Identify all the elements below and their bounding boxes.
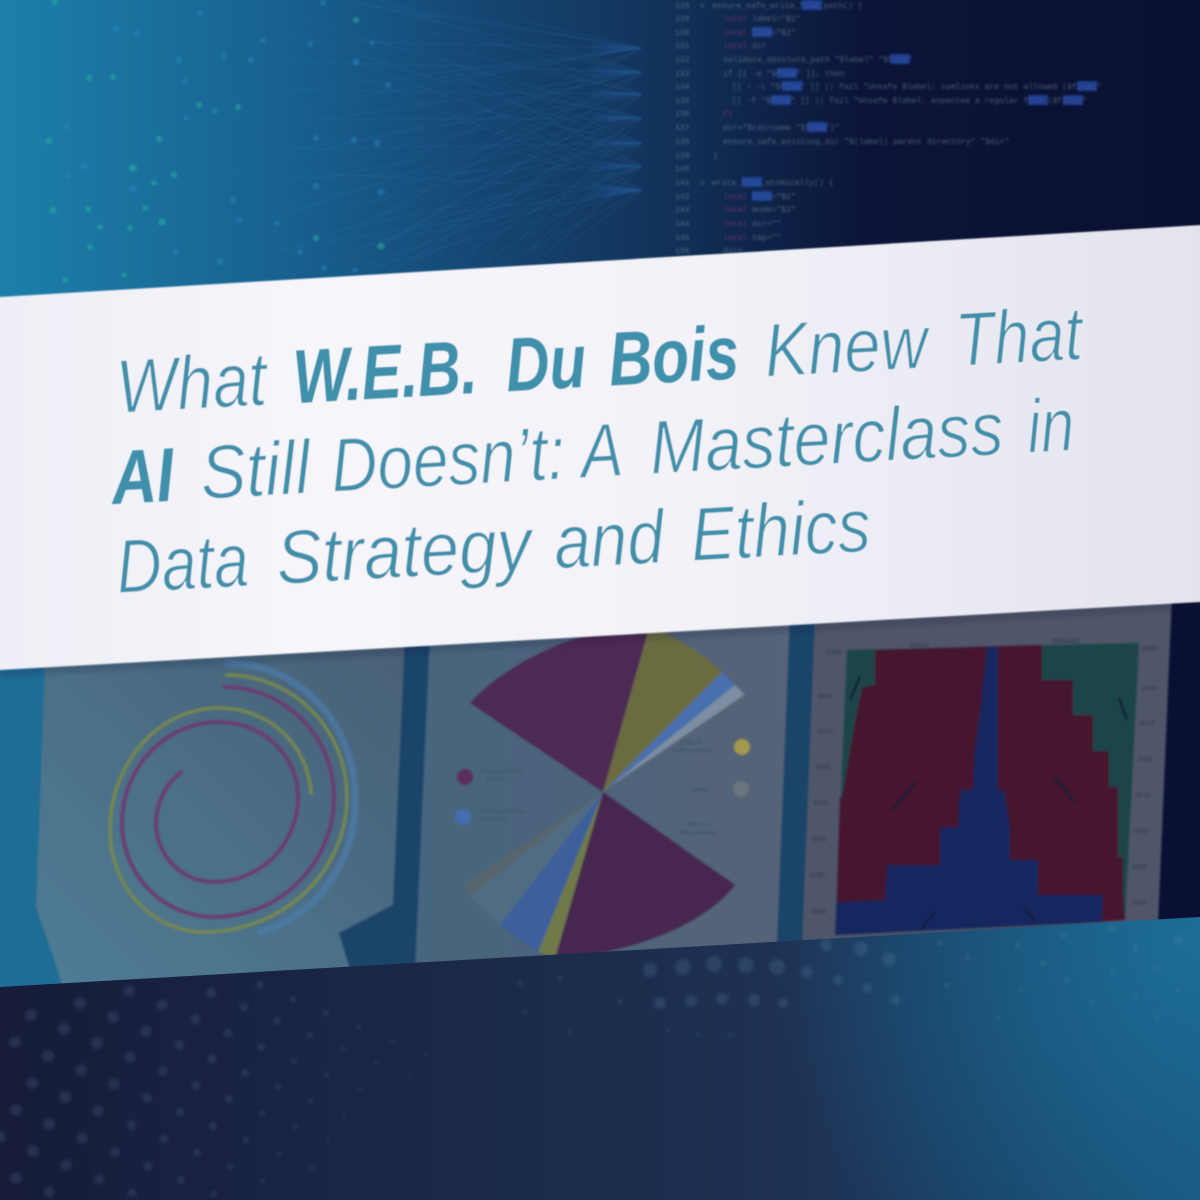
- title line 3: and: [552, 494, 668, 586]
- chart sheet: spiral: [36, 640, 405, 992]
- title line 3: [114, 483, 873, 610]
- bottom right dot pattern: [518, 924, 1183, 1037]
- title line 1: [114, 291, 1087, 430]
- population pyramid chart: 30-40: [812, 909, 826, 915]
- code editor snippet: v: [700, 179, 705, 188]
- pie legend: Negroes of African: [480, 769, 521, 775]
- code editor snippet: write_file_atomically() {: [712, 179, 834, 188]
- title line 1: Knew: [762, 300, 933, 394]
- pie legend: Whites of: [688, 822, 709, 828]
- population pyramid chart: MALES: [910, 643, 929, 649]
- population pyramid chart: 70-80: [816, 765, 830, 771]
- pie legend: descent: [486, 777, 504, 783]
- title line 3: Ethics: [688, 483, 873, 578]
- code editor snippet: 146: [675, 247, 690, 256]
- code editor snippet: file="$1": [752, 193, 796, 202]
- title line 3: Strategy: [274, 502, 537, 601]
- chart sheet: radial pie: [415, 615, 790, 968]
- title line 1: Du: [504, 319, 588, 408]
- title line 2: Still: [198, 425, 315, 516]
- title line 2: Doesn’t:: [329, 411, 567, 509]
- code editor snippet: 131: [675, 42, 690, 51]
- title line 1: W.E.B.: [291, 325, 479, 420]
- population pyramid chart: 50-60: [812, 837, 826, 843]
- population pyramid chart: 90-95: [818, 694, 832, 700]
- pie legend: native parentage: [680, 830, 717, 836]
- code editor snippet: 133: [675, 70, 690, 79]
- code editor snippet: local: [723, 42, 747, 51]
- code editor snippet: v: [700, 2, 705, 11]
- pie legend: foreign parentage: [672, 748, 711, 754]
- population pyramid chart: 50-60: [1134, 829, 1148, 835]
- dark blue backdrop of the chart wall: [338, 623, 816, 966]
- spiral chart: [110, 663, 355, 932]
- code editor snippet: 143: [675, 206, 690, 215]
- population pyramid chart: 70-80: [1138, 757, 1152, 763]
- pie legend: [455, 739, 750, 836]
- code editor snippet: 134: [675, 83, 690, 92]
- code editor snippet: local: [723, 206, 747, 215]
- code editor snippet: dir="": [752, 220, 781, 229]
- code editor snippet: local: [723, 193, 747, 202]
- code editor snippet: local: [723, 15, 747, 24]
- population pyramid chart: 80-90: [818, 729, 832, 735]
- population pyramid chart: 60-70: [1136, 793, 1150, 799]
- population pyramid chart: AGES: [826, 650, 842, 656]
- code editor snippet: dir="$(dirname "$file")": [723, 124, 840, 133]
- pie legend: Mulattoes and other: [480, 809, 525, 815]
- population pyramid chart: 90-95: [1142, 686, 1156, 692]
- population pyramid chart: 60-70: [814, 801, 828, 807]
- code editor snippet: }: [713, 152, 718, 161]
- code editor snippet: 136: [675, 110, 690, 119]
- title line 1: That: [953, 291, 1087, 383]
- pie legend: Whites of: [680, 740, 701, 746]
- left blue strip: [0, 667, 62, 987]
- radial pie chart: [463, 625, 745, 958]
- code editor snippet: file="$2": [752, 29, 796, 38]
- population pyramid chart: FEMALES: [1053, 639, 1079, 645]
- code editor snippet: dir=...: [723, 247, 757, 256]
- population pyramid chart: 80-90: [1140, 721, 1154, 727]
- title line 2: in: [1025, 382, 1076, 470]
- bottom left dot pattern: [0, 981, 426, 1198]
- code editor snippet: 139: [675, 152, 690, 161]
- title line 1: Bois: [606, 310, 741, 402]
- title line 1: What: [114, 337, 271, 430]
- title line 2: Masterclass: [647, 386, 1006, 491]
- network fan spikes: [585, 41, 642, 200]
- pie legend: Indians: [692, 787, 709, 793]
- code editor snippet: fi: [723, 110, 733, 119]
- code editor snippet: 142: [675, 193, 690, 202]
- band shadow: [0, 602, 1200, 676]
- white title band: [0, 223, 1200, 672]
- code editor snippet: 128: [675, 2, 690, 11]
- code editor snippet: ensure_safe_existing_dir "$(label) parent directory" "$dir": [723, 138, 1010, 147]
- code editor snippet: 141: [675, 179, 690, 188]
- title line 2: A: [575, 408, 625, 495]
- middle photo of Du Bois charts: [0, 603, 1173, 987]
- top background: [0, 0, 1200, 320]
- population pyramid chart: 40-50: [810, 873, 824, 879]
- code editor snippet: 144: [675, 220, 690, 229]
- title line 2: AI: [108, 433, 177, 521]
- code editor snippet: [[ -f "$file" ]] || fail "Unsafe $label: expected a regular file ($file)": [732, 97, 1087, 106]
- population pyramid chart: AGES: [1142, 646, 1158, 652]
- code editor snippet: 140: [675, 165, 690, 174]
- population pyramid chart: 40-50: [1132, 865, 1146, 871]
- chart sheet: population pyramid: [802, 595, 1172, 945]
- code editor snippet: 145: [675, 234, 690, 243]
- code search highlights: [742, 0, 1097, 201]
- code editor snippet: label="$1": [752, 15, 801, 24]
- population pyramid chart: 30-40: [1132, 900, 1146, 906]
- code editor snippet: tmp="": [752, 234, 781, 243]
- code editor snippet: 135: [675, 97, 690, 106]
- code editor snippet: mode="$2": [752, 206, 796, 215]
- code editor snippet: [675, 2, 1101, 256]
- title line 3: Data: [114, 518, 251, 610]
- code editor snippet: [[ ! -L "$file" ]] || fail "Unsafe $label: symlinks are not allowed ($file)": [732, 83, 1101, 92]
- code editor snippet: validate_absolute_path "$label" "$file": [723, 56, 912, 65]
- pie legend: mixed blood: [480, 817, 507, 823]
- code editor snippet: ensure_safe_write_file_path() {: [712, 2, 863, 11]
- title line 2: [108, 382, 1076, 521]
- network fan lines: [200, 0, 642, 285]
- code editor snippet: 130: [675, 29, 690, 38]
- code editor snippet: local: [723, 29, 747, 38]
- bottom right glow: [0, 917, 1200, 1200]
- code editor snippet: 137: [675, 124, 690, 133]
- code editor snippet: dir: [752, 42, 767, 51]
- population pyramid chart: [810, 639, 1158, 935]
- code editor snippet: if [[ -e "$file" ]]; then: [723, 70, 845, 79]
- code editor snippet: 138: [675, 138, 690, 147]
- code editor snippet: 129: [675, 15, 690, 24]
- code editor snippet: local: [723, 220, 747, 229]
- network dots: [46, 0, 391, 283]
- code editor snippet: 132: [675, 56, 690, 65]
- code editor snippet: local: [723, 234, 747, 243]
- bottom background: [0, 917, 1200, 1200]
- title: [108, 291, 1087, 610]
